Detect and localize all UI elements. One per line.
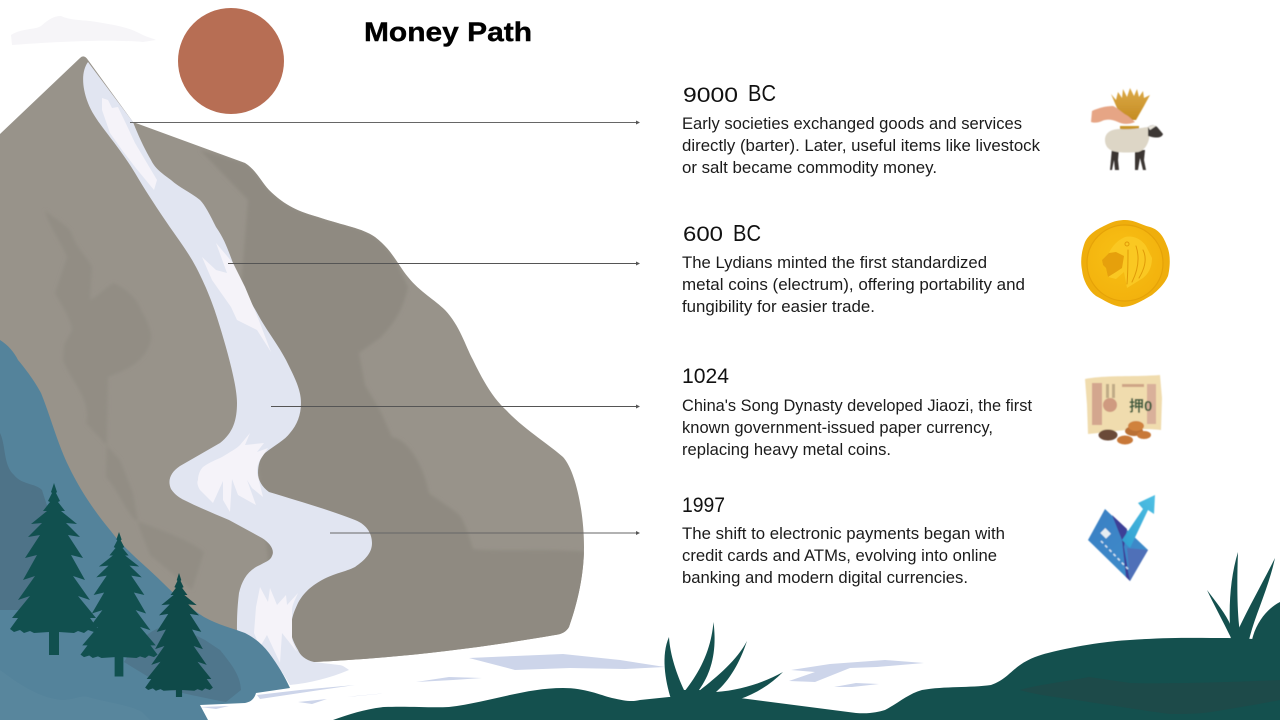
teal foreground ground xyxy=(333,638,1280,720)
description: directly (barter). Later, useful items like livestock xyxy=(682,137,1041,155)
description: banking and modern digital currencies. xyxy=(682,569,968,587)
year heading xyxy=(683,220,761,246)
year heading: BC xyxy=(748,80,776,106)
icon: gold lion coin xyxy=(1081,220,1170,307)
description: metal coins (electrum), offering portability and xyxy=(682,276,1025,294)
year heading: 1997 xyxy=(682,494,725,517)
cloud xyxy=(11,16,156,45)
connector arrow 3 xyxy=(271,404,640,408)
blue hill xyxy=(0,340,290,720)
description: The shift to electronic payments began with xyxy=(682,525,1005,543)
description: credit cards and ATMs, evolving into online xyxy=(682,547,997,565)
milestone: 9000 BC xyxy=(682,80,1041,177)
description xyxy=(682,525,1005,587)
grass tuft right xyxy=(1207,552,1280,642)
connector arrow 4 xyxy=(330,531,640,535)
year heading: BC xyxy=(733,220,761,246)
description: or salt became commodity money. xyxy=(682,159,937,177)
year heading: 600 xyxy=(683,223,723,246)
milestone: 1997 xyxy=(682,494,1005,587)
description: Early societies exchanged goods and services xyxy=(682,115,1022,133)
icon: paper banknote with coins: 押0 xyxy=(1129,397,1152,415)
year heading: 1024 xyxy=(682,365,729,388)
milestone: 1024 xyxy=(682,365,1032,459)
waterfall xyxy=(83,62,372,685)
connector arrow 1 xyxy=(130,120,640,124)
waterfall highlights xyxy=(102,98,298,663)
description: The Lydians minted the first standardized xyxy=(682,254,987,272)
title: Money Path xyxy=(364,17,532,47)
icon: paper banknote with coins xyxy=(1085,375,1162,444)
description: fungibility for easier trade. xyxy=(682,298,875,316)
pine tree large xyxy=(10,483,98,655)
pine tree medium xyxy=(80,532,158,676)
mountain xyxy=(0,56,590,670)
icon: credit card with rising arrow xyxy=(1088,495,1155,581)
dark ground shadow xyxy=(1020,677,1280,714)
grass tuft left xyxy=(665,622,783,699)
sun xyxy=(178,8,284,114)
pine tree small xyxy=(145,573,213,697)
icon: sheep with wheat and hand xyxy=(1091,88,1163,170)
description: replacing heavy metal coins. xyxy=(682,441,891,459)
year heading xyxy=(683,80,776,107)
year heading: 9000 xyxy=(683,84,738,107)
description xyxy=(682,397,1032,459)
connector arrow 2 xyxy=(228,262,640,266)
river ice patches xyxy=(200,654,924,709)
milestone: 600 BC xyxy=(682,220,1025,316)
description: known government-issued paper currency, xyxy=(682,419,993,437)
description xyxy=(682,115,1041,177)
description xyxy=(682,254,1025,316)
description: China's Song Dynasty developed Jiaozi, the first xyxy=(682,397,1032,415)
